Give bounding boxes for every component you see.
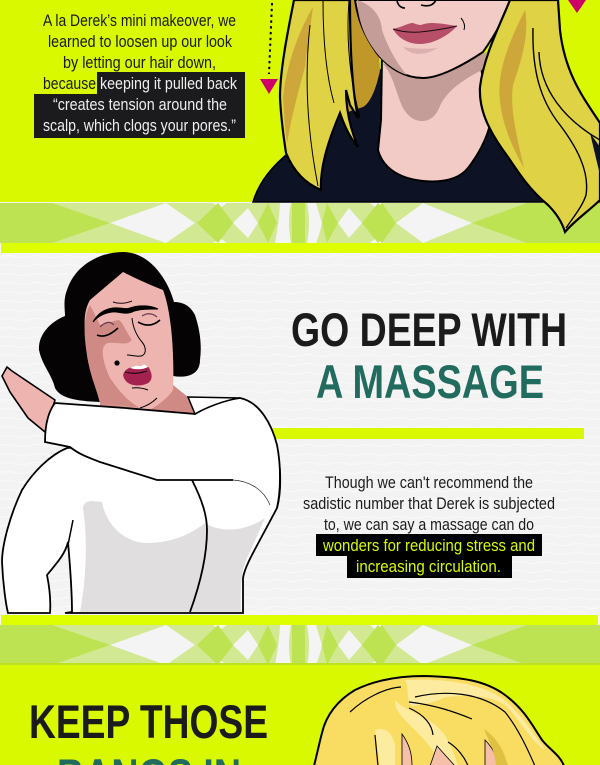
band bottom edge: [0, 663, 600, 665]
lime strip under upper band: [1, 243, 600, 253]
text block: massage: to, we can say a massage can do: [324, 515, 534, 534]
text block: massage: sadistic number that Derek is subjected: [303, 494, 555, 513]
right hair strands: [533, 28, 600, 228]
gray massage section background: [0, 253, 600, 615]
nose: [127, 318, 145, 356]
lips: [123, 365, 152, 385]
dress shading: [80, 501, 265, 612]
cheek crease: [461, 18, 465, 30]
hand: [2, 367, 55, 432]
left hair shade: [283, 7, 313, 143]
lip shadow: [403, 47, 438, 54]
lips: [393, 23, 457, 44]
collar: [188, 397, 240, 414]
text block: hair down: [34, 11, 245, 138]
decorative band: lower diamonds: [0, 625, 600, 665]
decorative band: upper diamonds: [0, 203, 600, 243]
right hair: [480, 0, 600, 232]
text block: hair down: keeping it pulled back: [100, 74, 237, 93]
nose: [397, 0, 436, 8]
face: [85, 272, 173, 410]
beauty mark: [114, 360, 120, 366]
right hair shade: [499, 10, 526, 168]
highlight box line one: [316, 534, 542, 556]
left hair strands: [307, 0, 360, 186]
hair: [39, 252, 201, 402]
text block: massage: wonders for reducing stress and: [322, 536, 535, 555]
lime strip above lower band: [1, 615, 598, 626]
shirt: [253, 70, 600, 202]
heading: keep those bangs in: KEEP THOSE: [29, 695, 268, 748]
highlight box line two: [347, 556, 512, 578]
text block: hair down: because: [43, 74, 96, 93]
highlight box: [34, 72, 245, 138]
hair shade: [484, 729, 508, 765]
text block: massage: increasing circulation.: [356, 557, 501, 576]
text block: massage: Though we can't recommend the: [325, 473, 533, 492]
illustration: blonde woman with hair down: [253, 0, 600, 232]
illustration: blonde woman with bangs: [314, 676, 564, 765]
text block: massage: [303, 473, 555, 578]
side seam: [68, 520, 73, 545]
torso: [2, 440, 280, 613]
heading: go deep with a massage: A MASSAGE: [316, 355, 544, 408]
left hair: [280, 0, 358, 190]
bottom lime section background: [0, 664, 600, 765]
dress center seam: [190, 480, 207, 612]
skin through bangs: [402, 734, 497, 765]
back hair: [345, 0, 380, 112]
dotted pointer arrow left: [260, 3, 278, 94]
illustration: woman stretching arm: [2, 252, 280, 613]
shirt corner right: [590, 133, 600, 175]
heading: go deep with a massage: [291, 303, 567, 408]
face shadow: [85, 305, 140, 408]
forehead creases: [113, 301, 132, 303]
neck and chest: [378, 55, 490, 181]
top lime section background: [0, 0, 600, 202]
eyes: [97, 320, 160, 336]
text block: hair down: by letting our hair down,: [63, 53, 216, 72]
lime divider bar: [273, 428, 584, 439]
text block: hair down: scalp, which clogs your pores.”: [43, 116, 236, 135]
hair strands: [350, 687, 535, 765]
brow: [93, 306, 158, 322]
neck: [100, 385, 195, 415]
hair base: [314, 676, 564, 765]
face shadow: [357, 0, 407, 75]
hair highlights: [405, 680, 545, 750]
pink arrow tip right: [568, 0, 586, 13]
sleeve arm: [45, 398, 280, 505]
text block: hair down: A la Derek’s mini makeover, we: [43, 11, 236, 30]
heading: keep those bangs in: [29, 695, 268, 765]
face: [355, 0, 510, 78]
text block: hair down: “creates tension around the: [53, 95, 227, 114]
neck shadow: [382, 52, 487, 121]
text block: hair down: learned to loosen up our look: [48, 32, 232, 51]
